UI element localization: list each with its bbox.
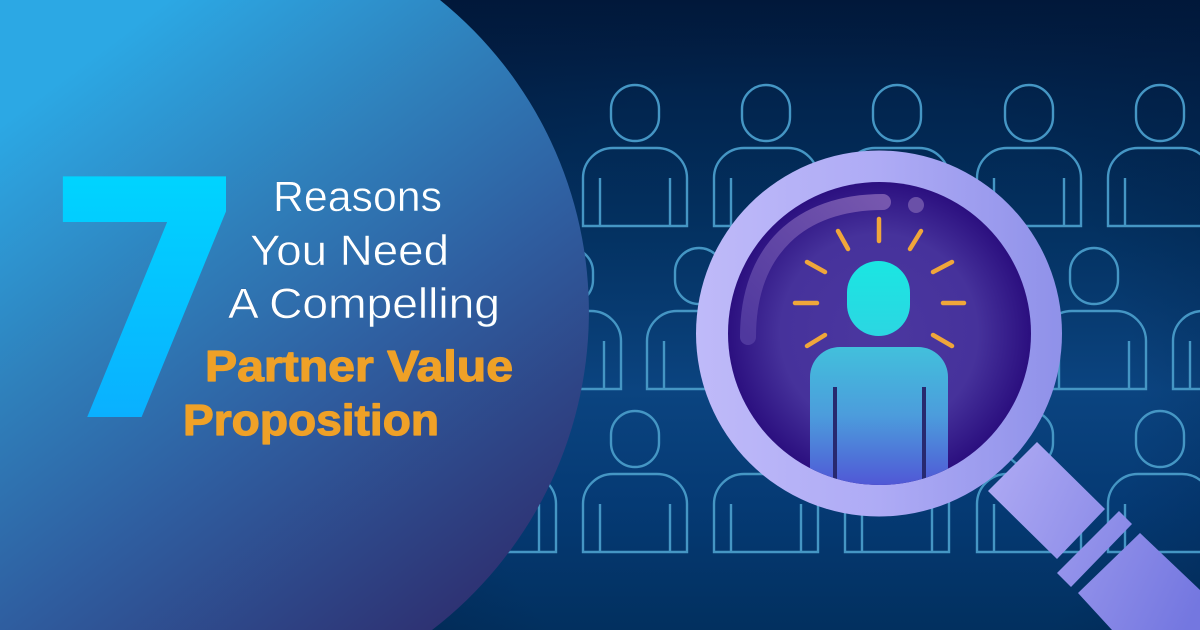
lens [728, 182, 1031, 485]
person: bottom row 2 [583, 411, 687, 552]
title line: Reasons: Reasons [273, 173, 442, 221]
person: top row 3 [845, 85, 949, 226]
person: middle row 2 [647, 248, 751, 389]
person: top row 2 [714, 85, 818, 226]
magnifier handle [988, 442, 1200, 630]
person head [847, 261, 910, 336]
person: top row 5 [1108, 85, 1200, 226]
person arm lines [835, 387, 924, 490]
title line: You Need: You Need [250, 227, 449, 275]
person: bottom row 3 [714, 411, 818, 552]
title line: Partner Value: Partner Value [205, 342, 513, 391]
highlighted person [810, 261, 948, 490]
person: bottom row 6 [1108, 411, 1200, 552]
person: middle row 4 [1173, 311, 1200, 389]
person: bottom row 5 [977, 411, 1081, 552]
icon: magnifying glass [696, 150, 1200, 630]
numeral 7: 7 [43, 112, 250, 496]
panel: title disc [0, 0, 589, 630]
lens glare dot [908, 197, 924, 213]
lens glare arc [748, 202, 883, 337]
attention rays [795, 219, 964, 346]
magnifier ring [696, 150, 1062, 516]
crowd of outlined people [452, 85, 1200, 552]
person: top row 1 [583, 85, 687, 226]
person: middle row 3 [1042, 248, 1146, 389]
person: bottom row 1 [452, 411, 556, 552]
title line: Proposition: Proposition [183, 396, 439, 445]
title line: A Compelling: A Compelling [228, 280, 500, 328]
person: top row 4 [977, 85, 1081, 226]
person: bottom row 4 [845, 411, 949, 552]
title text [183, 173, 513, 445]
person: middle row 1 [517, 248, 621, 389]
person body [810, 347, 948, 490]
